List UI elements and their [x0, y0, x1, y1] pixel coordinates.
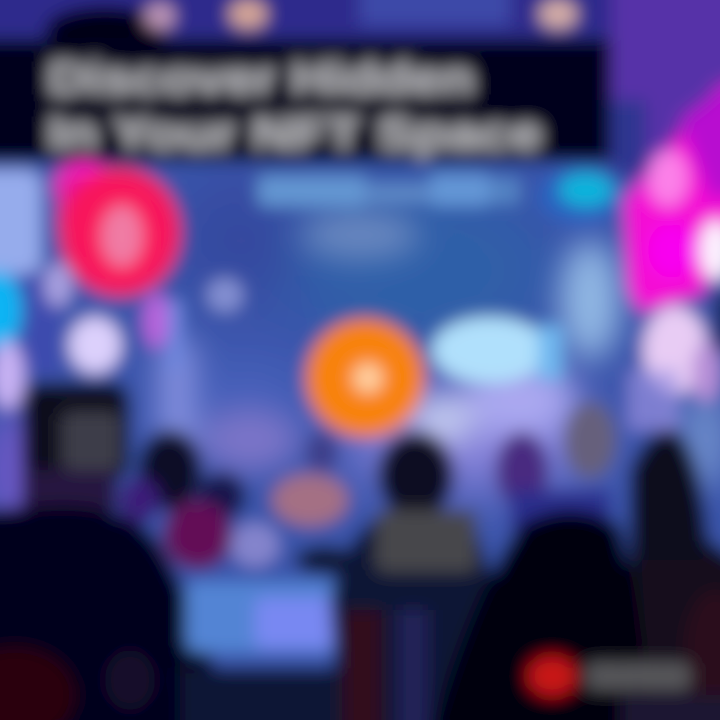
person: centre front: [330, 431, 500, 720]
person: centre blurred: [231, 432, 355, 574]
blurred photo scene: YouTube: [590, 664, 688, 689]
blue table: [186, 582, 338, 652]
person: front left: [0, 382, 238, 720]
logo: wordmark: [586, 662, 690, 690]
logo watermark: [528, 656, 690, 696]
subtitle glow text: [258, 174, 520, 206]
title panel: [0, 38, 611, 162]
person: back row right: [496, 402, 720, 720]
audience silhouettes: [0, 382, 720, 720]
cyan corner light: [538, 168, 622, 224]
person: front right: [430, 510, 650, 720]
title text: In Your NFT Space: [48, 107, 542, 159]
logo: red play icon: [528, 656, 576, 696]
ceiling lights strip: [0, 0, 720, 54]
right purple wall: [612, 0, 720, 180]
icon: orange circle: [306, 319, 424, 437]
person: second row left: [120, 430, 246, 569]
right magenta screen: [624, 70, 720, 402]
light spots: [0, 278, 678, 430]
title text: Discover Hidden: [48, 52, 474, 104]
icon: cyan left circle: [0, 270, 22, 350]
icon: pink circle: [44, 160, 180, 307]
left light panel: [0, 170, 41, 274]
title text: [48, 52, 542, 159]
